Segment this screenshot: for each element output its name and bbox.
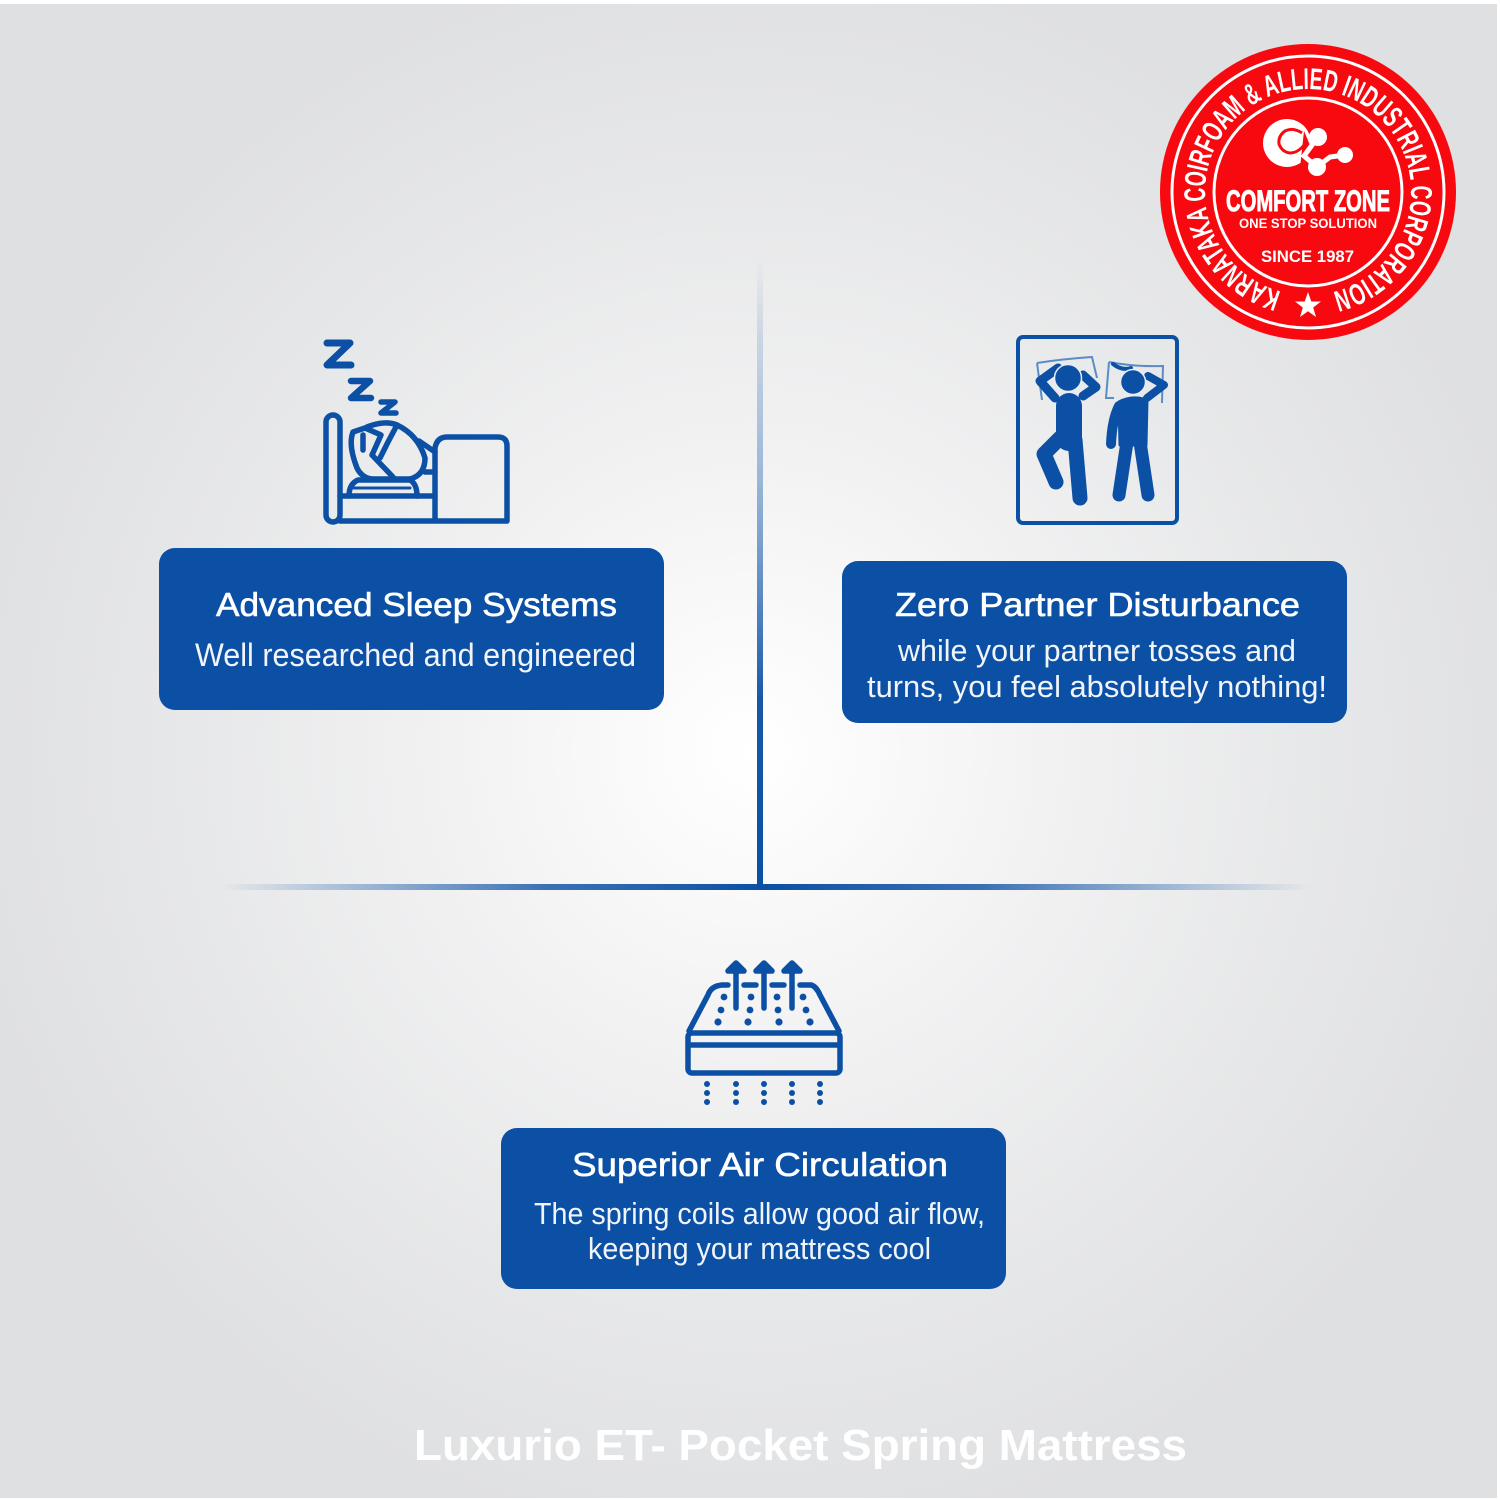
icon: two people sleeping on a mattress [1018,337,1177,523]
seal ring text: KARNATAKA COIRFOAM & ALLIED INDUSTRIAL CORPORATION [1184,68,1432,312]
divider: horizontal line [220,884,1310,890]
icon detail: man [1040,364,1096,498]
icon: comfort zone logo [1263,119,1353,176]
text: air description: The spring coils allow good air flow, [534,1196,985,1231]
tagline: ONE STOP SOLUTION [1239,215,1377,231]
panel: superior air circulation [501,1128,1006,1289]
icon: sleeping person in bed [326,343,507,522]
text: air description: keeping your mattress cool [588,1231,931,1266]
icon: star [1295,292,1321,317]
text: partner description [867,633,1327,704]
since: SINCE 1987 [1261,248,1354,266]
text: partner description: while your partner tosses and [897,633,1296,668]
icon detail: dots [704,994,823,1105]
divider: vertical line [757,260,763,887]
icon detail: pillows [1037,357,1163,403]
icon: mattress with airflow [688,963,840,1105]
heading: zero partner disturbance: Zero Partner Disturbance [895,586,1300,623]
text: well researched: Well researched and engineered [195,637,636,673]
heading: advanced sleep systems: Advanced Sleep Systems [216,586,617,623]
text: air description [534,1196,985,1266]
brand name: COMFORT ZONE [1226,185,1390,218]
text: partner description: turns, you feel absolutely nothing! [867,669,1327,704]
panel: zero partner disturbance [842,561,1347,723]
heading: superior air circulation: Superior Air Circulation [572,1146,948,1183]
badge: comfort zone seal [1160,44,1456,340]
panel: advanced sleep systems [159,548,664,710]
icon detail: woman [1111,364,1164,495]
footer title: Luxurio ET- Pocket Spring Mattress [414,1421,1187,1470]
